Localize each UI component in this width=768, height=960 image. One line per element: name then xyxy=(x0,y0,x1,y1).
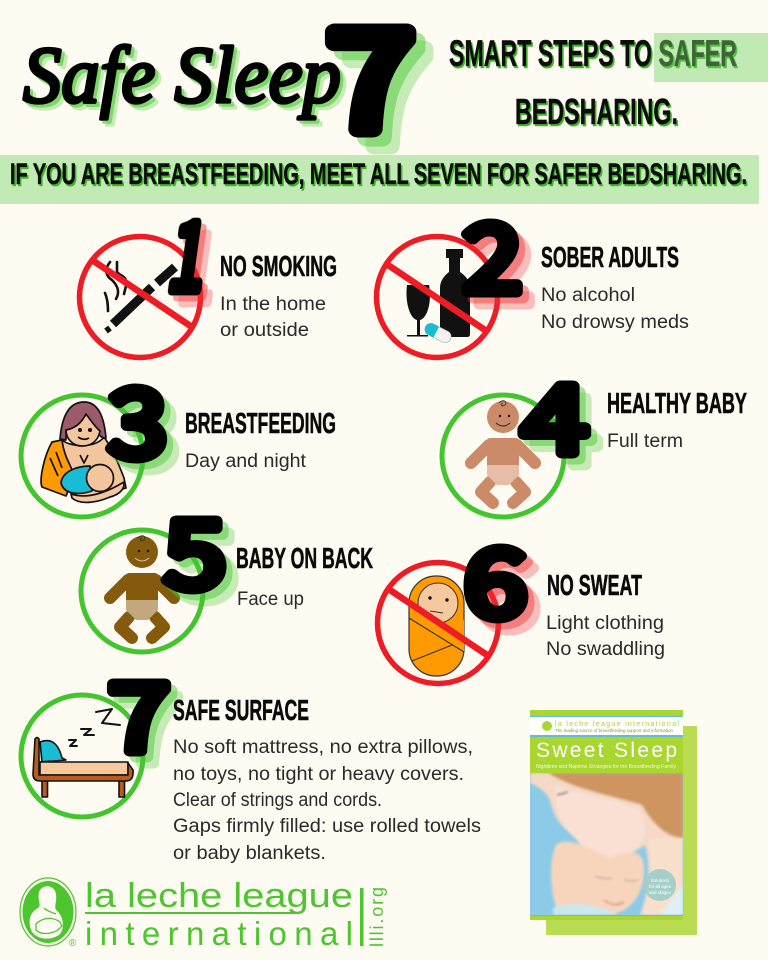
icon: alcohol and pills xyxy=(376,236,498,358)
body: No soft mattress, no extra pillows, xyxy=(173,737,473,758)
body xyxy=(173,737,481,864)
step 4: healthy baby xyxy=(442,345,747,517)
step 3: breastfeeding xyxy=(21,349,336,517)
book publisher line xyxy=(542,721,679,733)
numeral 2: 2 xyxy=(463,184,522,320)
heading: SAFE SURFACE xyxy=(173,695,309,727)
body xyxy=(220,294,326,341)
step 7: safe surface xyxy=(21,643,481,864)
icon: bed with zzz xyxy=(21,695,143,817)
body: No swaddling xyxy=(546,639,665,660)
heading: SOBER ADULTS xyxy=(541,242,679,274)
numeral 4: 4 xyxy=(522,345,588,481)
website: llli.org xyxy=(367,887,387,947)
body: Full term xyxy=(607,431,683,452)
body: Clear of strings and cords. xyxy=(173,790,382,811)
book: Sweet Sleep xyxy=(530,710,697,935)
body: Face up xyxy=(237,589,304,610)
step 1: no smoking xyxy=(80,182,337,358)
book badge: for all ages xyxy=(649,884,672,889)
body: No drowsy meds xyxy=(541,312,689,333)
subtitle: BEDSHARING. xyxy=(515,91,678,132)
book publisher line: The leading source of breastfeeding support and information xyxy=(555,728,674,733)
body: Gaps firmly filled: use rolled towels xyxy=(173,816,481,837)
numeral 5: 5 xyxy=(164,480,226,616)
logo: la leche league international: international xyxy=(85,915,353,952)
numeral 3: 3 xyxy=(108,349,167,485)
step 2: sober adults xyxy=(376,184,689,358)
icon: swaddled baby xyxy=(378,562,498,684)
heading: NO SMOKING xyxy=(220,251,337,283)
body: no toys, no tight or heavy covers. xyxy=(173,764,464,785)
step 6: no sweat xyxy=(378,509,665,684)
logo: la leche league international xyxy=(20,877,387,952)
body: Day and night xyxy=(185,451,307,472)
book: Sweet Sleep: Nighttime and Naptime Strategies for the Breastfeeding Family xyxy=(536,764,676,770)
book badge: and stages xyxy=(649,890,672,895)
book title: Sweet Sleep xyxy=(536,739,677,762)
title: Safe Sleep: Safe Sleep xyxy=(23,32,341,120)
body xyxy=(541,285,689,333)
book badge: Solutions xyxy=(651,878,670,883)
icon: baby on back xyxy=(81,530,203,652)
banner xyxy=(0,155,759,204)
heading: BREASTFEEDING xyxy=(185,408,336,440)
icon: no smoking xyxy=(80,236,200,358)
body: In the home xyxy=(220,294,326,315)
book badge xyxy=(644,869,676,901)
numeral 1: 1 xyxy=(162,182,217,318)
logo emblem xyxy=(20,878,76,946)
heading: NO SWEAT xyxy=(547,570,642,602)
body: or outside xyxy=(220,320,309,341)
book publisher line: la leche league international xyxy=(555,721,679,728)
body: Light clothing xyxy=(546,613,664,634)
step 5: baby on back xyxy=(81,480,373,652)
numeral 6: 6 xyxy=(464,509,527,645)
registered mark: ® xyxy=(69,938,77,949)
league name: la leche league xyxy=(85,877,353,915)
icon: baby xyxy=(442,395,564,517)
subtitle xyxy=(449,33,768,132)
numeral 7: 7 xyxy=(108,643,170,779)
book photo xyxy=(530,773,683,915)
body xyxy=(546,613,665,660)
body: or baby blankets. xyxy=(173,843,326,864)
icon: mother nursing baby xyxy=(21,395,143,517)
heading: BABY ON BACK xyxy=(236,543,373,575)
body: No alcohol xyxy=(541,285,635,306)
